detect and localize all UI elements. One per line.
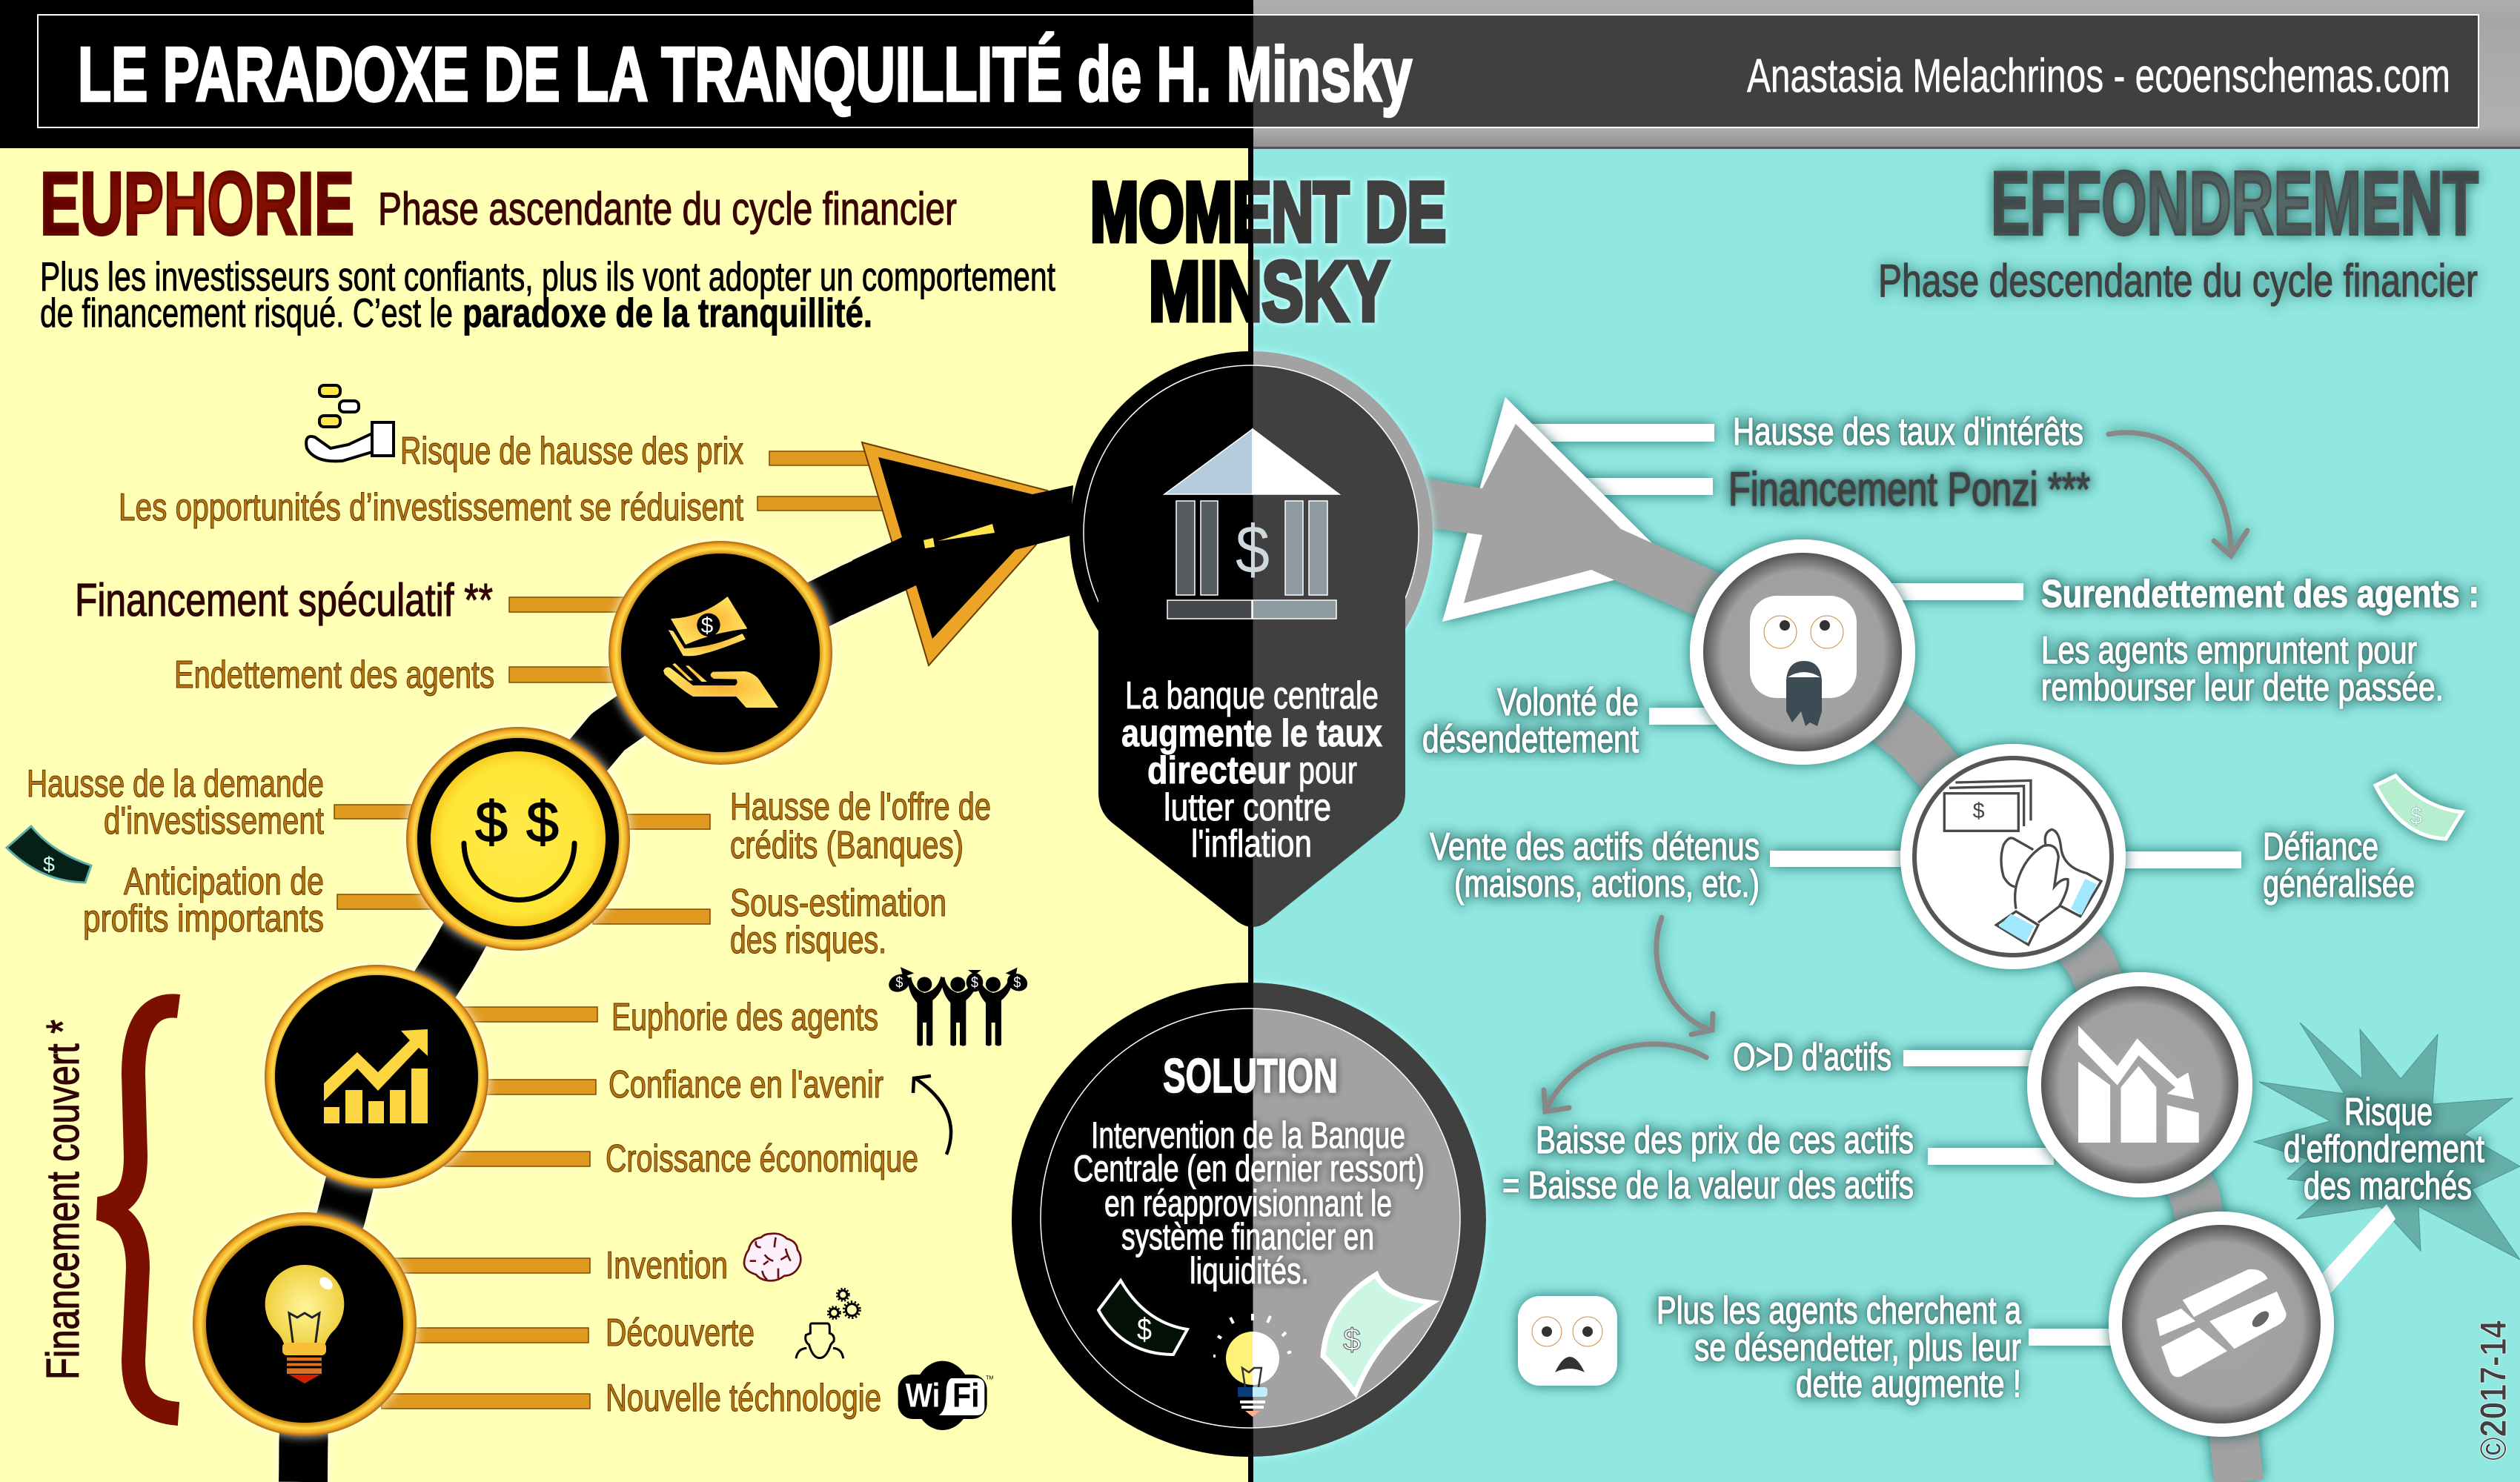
copyright: ©2017-14	[2473, 1320, 2514, 1461]
labels: défiance: généralisée	[2263, 863, 2415, 906]
icon: banknote and hand: $	[701, 614, 714, 638]
text: surendettement	[2041, 573, 2479, 709]
labels: défiance	[2263, 825, 2415, 906]
labels: vente des actifs: (maisons, actions, etc.)	[1454, 863, 1760, 906]
labels: baisse des prix	[1502, 1119, 1914, 1207]
icon: small green banknote: $	[2410, 803, 2422, 829]
text: intervention: Centrale (en dernier ressort)	[1073, 1148, 1425, 1189]
labels: offre de crédits	[730, 785, 991, 867]
icon: hand with coins	[306, 385, 394, 461]
label: risque de hausse des prix: Risque de hausse des prix	[400, 430, 743, 473]
labels: invention, découverte, nouvelle technologie	[606, 1244, 881, 1420]
central divider	[1248, 148, 1253, 1482]
labels: sous-estimation	[730, 882, 946, 962]
heading: moment de Minsky: MINSKY	[1149, 245, 1389, 338]
icon: thinking person with gears	[796, 1289, 860, 1358]
background: effondrement panel	[1253, 148, 2520, 1482]
icon: wifi logo	[898, 1361, 994, 1430]
label: opportunités: Les opportunités d’investissement se réduisent	[119, 486, 743, 529]
text: banque centrale: La banque centrale	[1125, 674, 1379, 717]
label: endettement: Endettement des agents	[174, 654, 494, 697]
labels: invention, découverte, nouvelle technologie: Découverte	[606, 1312, 755, 1355]
text: intervention	[1073, 1114, 1425, 1292]
circle: wallet	[2109, 1212, 2334, 1437]
labels: euphorie, confiance, croissance: Euphorie des agents	[611, 996, 878, 1039]
text: banque centrale: augmente le taux	[1121, 712, 1382, 755]
labels: demande d'investissement	[27, 762, 324, 843]
icon: wifi logo: Wi	[906, 1376, 940, 1414]
text: risque d'effondrement	[2284, 1091, 2484, 1208]
icon: falling bars	[2078, 1026, 2199, 1143]
heading: effondrement	[1878, 153, 2478, 307]
labels: sous-estimation: Sous-estimation	[730, 882, 946, 925]
labels: taux and ponzi: Financement Ponzi ***	[1728, 462, 2090, 516]
background: euphorie panel	[0, 148, 1248, 1482]
text block: paradoxe: paradoxe de la tranquillité.	[462, 290, 872, 336]
labels: invention, découverte, nouvelle technologie: Nouvelle téchnologie	[606, 1377, 881, 1420]
labels: anticipation	[83, 860, 324, 940]
label: volonté de désendettement: désendettement	[1422, 718, 1639, 761]
brace: financement couvert	[99, 1006, 179, 1414]
label: offre supérieure à la demande: O>D d'actifs	[1733, 1036, 1891, 1079]
connector lines: left side	[334, 451, 883, 1409]
icon: brain	[744, 1234, 800, 1280]
icon: dark banknote: $	[43, 853, 55, 876]
text: surendettement: Les agents empruntent pour	[2041, 629, 2417, 672]
circle: growth chart	[265, 965, 488, 1189]
text block: paradoxe	[40, 253, 1055, 336]
text block: paradoxe: de financement risqué. C’est le	[40, 290, 453, 336]
labels: baisse des prix: Baisse des prix de ces actifs	[1536, 1119, 1914, 1162]
icon: bank building: $	[1236, 512, 1270, 588]
arrow: offre demande to baisse	[1544, 1044, 1706, 1112]
text: banque centrale: directeur	[1147, 749, 1290, 792]
title: LE PARADOXE DE LA TRANQUILLITÉ de H. Minsky	[78, 32, 1412, 118]
labels: taux and ponzi	[1728, 411, 2090, 516]
icon: cheering agents with bags: $	[971, 974, 978, 991]
icon: wifi logo: TM	[986, 1375, 994, 1381]
labels: demande d'investissement: Hausse de la demande	[27, 762, 324, 805]
icon: banknote dark: $	[1137, 1312, 1152, 1346]
text: banque centrale: lutter contre	[1164, 786, 1331, 829]
labels: invention, découverte, nouvelle technologie: Invention	[606, 1244, 728, 1287]
heading: solution: SOLUTION	[1163, 1049, 1338, 1103]
text block: paradoxe: Plus les investisseurs sont confiants, plus ils vont adopter un comportement	[40, 253, 1055, 299]
falling gray band and arrow head	[1422, 397, 2239, 1482]
text: intervention: Intervention de la Banque	[1091, 1114, 1405, 1156]
heading: euphorie: EUPHORIE	[40, 154, 354, 253]
icon: bank building	[1164, 429, 1339, 619]
text: plus les agents	[1657, 1289, 2021, 1406]
circle: worried face	[1690, 539, 1915, 765]
labels: demande d'investissement: d'investissement	[104, 800, 324, 843]
icon: banknotes and hands	[1944, 780, 2101, 945]
text: intervention: système financier en	[1121, 1216, 1374, 1257]
labels: offre de crédits: crédits (Banques)	[730, 824, 964, 867]
connector lines: right side	[1512, 424, 2241, 1346]
rising black path	[303, 561, 912, 1482]
labels: baisse des prix: = Baisse de la valeur des actifs	[1502, 1164, 1914, 1207]
icon: sad face	[1518, 1296, 1617, 1386]
labels: taux and ponzi: Hausse des taux d'intérêts	[1733, 411, 2083, 453]
icon: small green banknote	[2375, 776, 2462, 839]
text: intervention: en réapprovisionnant le	[1104, 1183, 1392, 1224]
text: intervention: liquidités.	[1190, 1250, 1309, 1292]
icon: banknote and hand	[663, 597, 778, 708]
label: financement spéculatif: Financement spéculatif **	[75, 575, 493, 626]
labels: anticipation: Anticipation de	[124, 860, 324, 903]
text: plus les agents: se désendetter, plus leur	[1694, 1326, 2021, 1369]
labels: euphorie, confiance, croissance: Croissance économique	[606, 1137, 918, 1180]
labels: offre de crédits: Hausse de l'offre de	[730, 785, 991, 828]
text: banque centrale: pour	[1299, 749, 1357, 792]
icon: cheering agents with bags	[886, 967, 1030, 1046]
header band	[0, 0, 2520, 149]
icon: bulb	[265, 1265, 344, 1383]
circle: falling chart	[2027, 972, 2252, 1197]
heading: moment de Minsky: MOMENT DE	[1090, 165, 1446, 259]
text: risque d'effondrement: Risque	[2344, 1091, 2433, 1134]
heading: moment de Minsky	[1090, 165, 1446, 338]
icon: bulb solution	[1213, 1314, 1291, 1417]
text: plus les agents: dette augmente !	[1796, 1363, 2021, 1406]
label: volonté de désendettement: Volonté de	[1497, 681, 1639, 724]
labels: défiance: Défiance	[2263, 825, 2378, 868]
labels: vente des actifs: Vente des actifs détenus	[1430, 825, 1760, 868]
arrow: croissance to confiance	[913, 1076, 951, 1154]
solution panel	[1012, 983, 1486, 1457]
heading: euphorie	[40, 154, 957, 253]
circle: innovation bulb	[193, 1212, 417, 1436]
text: banque centrale	[1121, 674, 1382, 865]
text: risque d'effondrement: des marchés	[2304, 1165, 2472, 1208]
starburst: risque d'effondrement	[2254, 1023, 2520, 1294]
labels: euphorie, confiance, croissance: Confiance en l'avenir	[609, 1063, 883, 1106]
icon: banknote dark	[1098, 1280, 1187, 1355]
icon: bars and arrow	[324, 1029, 428, 1123]
icon: banknotes and hands: $	[1973, 799, 1985, 823]
icon: banknote green	[1323, 1275, 1432, 1393]
heading: euphorie: Phase ascendante du cycle financier	[378, 184, 957, 235]
text: plus les agents: Plus les agents cherchent a	[1657, 1289, 2021, 1332]
labels: anticipation: profits importants	[83, 897, 324, 940]
arrow: vente to offre demande	[1657, 917, 1713, 1034]
icon: dark banknote	[7, 826, 91, 883]
connector: wallet to starburst	[2319, 1204, 2395, 1294]
arrow: taux to surendettement	[2109, 433, 2247, 556]
circle: smiley	[406, 727, 630, 951]
labels: euphorie, confiance, croissance	[606, 996, 918, 1180]
icon: wallet	[2156, 1269, 2287, 1377]
icon: wifi logo: Fi	[952, 1376, 980, 1414]
text: banque centrale: l'inflation	[1191, 823, 1312, 865]
labels: vente des actifs	[1430, 825, 1760, 906]
circle: smiley: $	[526, 789, 559, 854]
icon: banknote green: $	[1343, 1322, 1361, 1357]
circle: finance speculative	[609, 541, 832, 765]
icon: cheering agents with bags: $	[895, 974, 903, 991]
labels: sous-estimation: des risques.	[730, 919, 886, 962]
icon: cheering agents with bags: $	[1013, 974, 1021, 991]
label: financement couvert: Financement couvert *	[38, 1020, 89, 1380]
central bank panel	[1070, 351, 1433, 927]
circle: selling assets	[1900, 744, 2126, 969]
arrow head: rising	[852, 442, 1073, 665]
label: volonté de désendettement	[1422, 681, 1639, 761]
circle: smiley: $	[475, 789, 508, 854]
